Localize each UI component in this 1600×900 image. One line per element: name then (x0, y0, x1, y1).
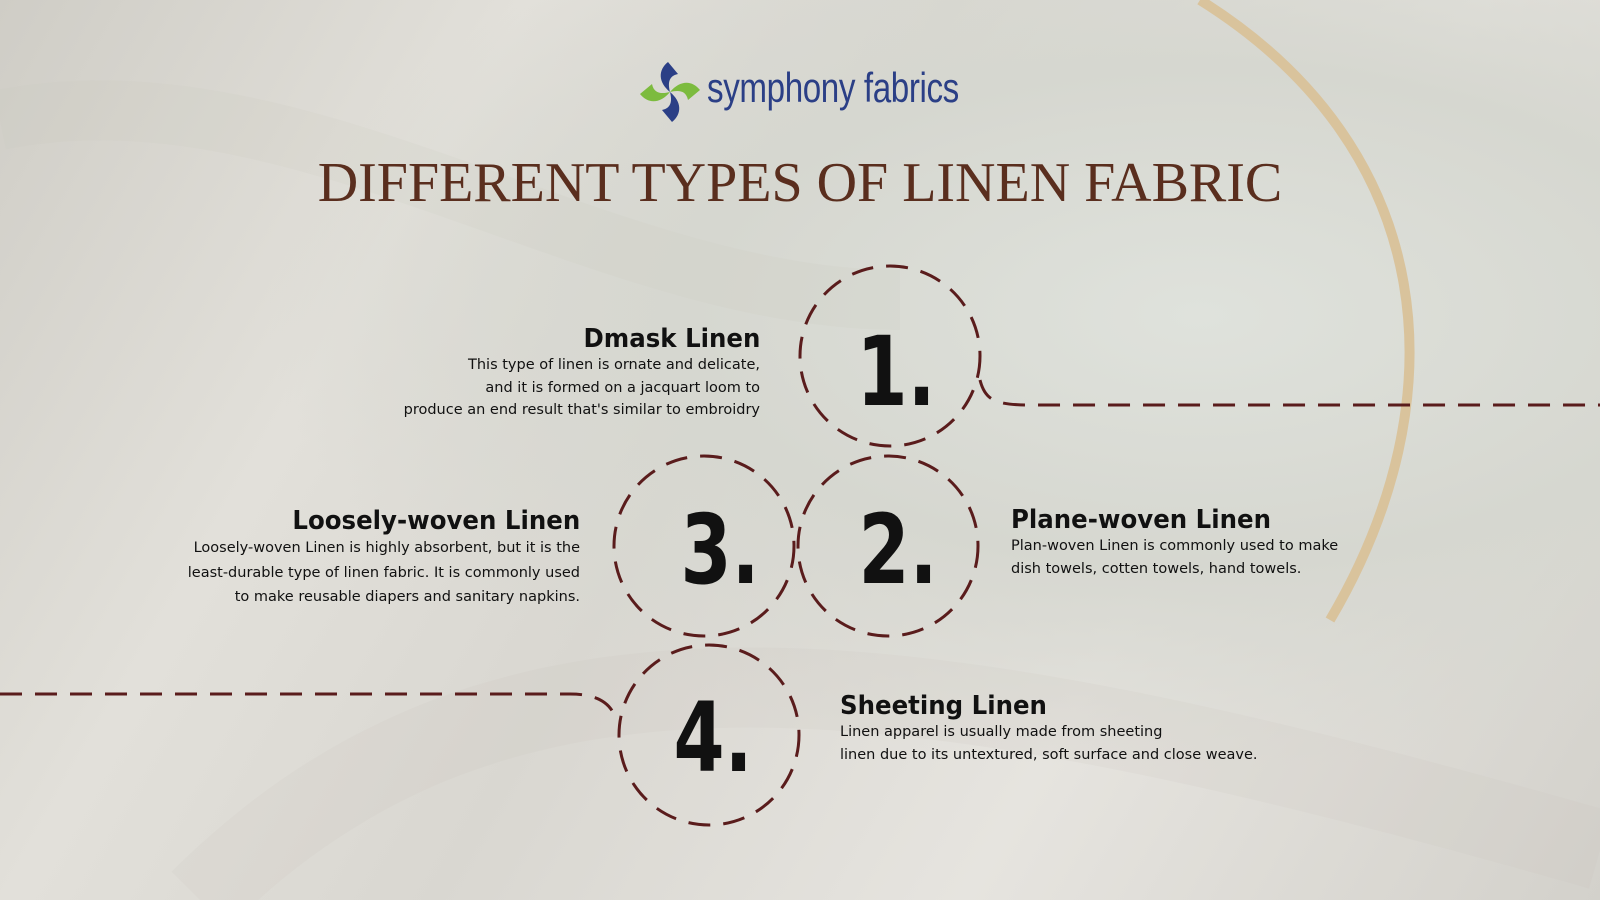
text: Plane-woven Linen (1011, 505, 1338, 576)
text: Sheeting Linen: Sheeting Linen (840, 691, 1047, 721)
title: DIFFERENT TYPES OF LINEN FABRIC (318, 152, 1282, 214)
icon: swirl (640, 62, 700, 122)
text: Loosely-woven Linen: least-durable type of linen fabric. It is commonly used (188, 564, 580, 580)
text: Sheeting Linen (840, 691, 1258, 762)
text: Plane-woven Linen: Plane-woven Linen (1011, 505, 1271, 535)
number 4: 4. (674, 682, 752, 794)
number 3: 3. (681, 494, 759, 606)
text: Loosely-woven Linen: to make reusable diapers and sanitary napkins. (235, 589, 580, 605)
number 1: 1. (857, 316, 935, 428)
text: Dmask Linen: and it is formed on a jacquart loom to (485, 380, 760, 396)
text: Plane-woven Linen: dish towels, cotten towels, hand towels. (1011, 560, 1301, 576)
text: Dmask Linen: Dmask Linen (583, 324, 760, 354)
logo (640, 62, 959, 122)
logo text: symphony fabrics (707, 64, 959, 111)
text: Dmask Linen: produce an end result that's similar to embroidry (404, 402, 760, 418)
text: Dmask Linen: This type of linen is ornate and delicate, (468, 357, 760, 373)
text: Loosely-woven Linen: Loosely-woven Linen (292, 506, 580, 536)
text: Sheeting Linen: Linen apparel is usually made from sheeting (840, 724, 1162, 740)
text: Loosely-woven Linen (188, 506, 580, 605)
text: Plane-woven Linen: Plan-woven Linen is commonly used to make (1011, 538, 1338, 554)
text: Dmask Linen (404, 324, 760, 418)
text: Loosely-woven Linen: Loosely-woven Linen is highly absorbent, but it is the (194, 540, 580, 556)
number 2: 2. (859, 494, 937, 606)
text: Sheeting Linen: linen due to its untextured, soft surface and close weave. (840, 746, 1258, 762)
